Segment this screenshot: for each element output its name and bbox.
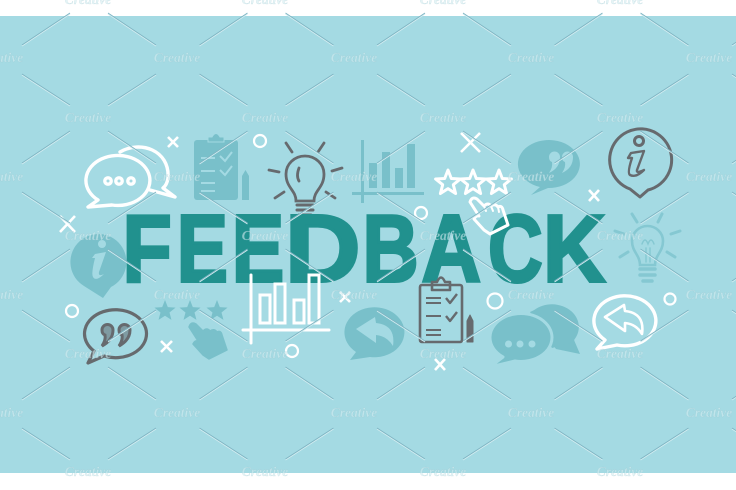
watermark labels: Creative [65, 464, 111, 479]
watermark labels: Creative [420, 346, 466, 361]
watermark labels: Creative [597, 346, 643, 361]
icon: grey info bubble [610, 129, 672, 197]
watermark labels: Creative [65, 346, 111, 361]
icon: muted bar chart [352, 140, 424, 203]
icon: grey light bulb [269, 143, 342, 215]
watermark labels: Creative [508, 405, 554, 420]
watermark labels: Creative [65, 110, 111, 125]
watermark labels: Creative [597, 110, 643, 125]
watermark labels: Creative [597, 464, 643, 479]
watermark labels: Creative [331, 405, 377, 420]
icon: grey quote bubble [85, 310, 147, 363]
watermark labels: Creative [686, 405, 732, 420]
watermark labels: Creative [154, 50, 200, 65]
watermark labels: Creative [154, 169, 200, 184]
title: D [285, 195, 361, 303]
icon: grey clipboard [420, 278, 473, 342]
watermark labels: Creative [65, 228, 111, 243]
watermark labels: Creative [331, 169, 377, 184]
watermark labels: Creative [154, 287, 200, 302]
icon: white bar chart [243, 275, 329, 343]
title: A [422, 195, 481, 302]
icon: white pointing hand [470, 198, 508, 234]
watermark labels: Creative [242, 346, 288, 361]
icon: white double speech bubbles [86, 147, 175, 207]
icon: muted quote bubble [518, 140, 580, 195]
decorative rings [66, 135, 676, 357]
decorative crosses [60, 133, 599, 370]
watermark labels: Creative [154, 405, 200, 420]
watermark labels: Creative [242, 464, 288, 479]
watermark labels: Creative [420, 110, 466, 125]
icon: muted clipboard [194, 134, 249, 200]
icon: muted reply bubble [344, 307, 404, 360]
watermark labels: Creative [508, 169, 554, 184]
title: E [177, 195, 228, 302]
watermark labels: Creative [508, 287, 554, 302]
watermark labels: Creative [686, 287, 732, 302]
watermark labels: Creative [420, 228, 466, 243]
title: K [543, 195, 605, 303]
icon: muted stars [154, 300, 228, 320]
watermark labels: Creative [331, 50, 377, 65]
icon: faded light bulb [615, 214, 680, 281]
icon: muted double speech bubbles [490, 304, 580, 367]
icon: white stars [436, 170, 511, 194]
title: C [488, 196, 543, 303]
watermark labels: Creative [242, 110, 288, 125]
title: B [362, 195, 419, 302]
watermark labels: Creative [331, 287, 377, 302]
watermark labels: Creative [686, 169, 732, 184]
watermark labels: Creative [420, 464, 466, 479]
title [122, 195, 605, 303]
title: F [122, 195, 172, 302]
icon: white reply bubble [594, 296, 656, 349]
icon: muted info bubble [70, 234, 126, 298]
watermark labels: Creative [242, 228, 288, 243]
icon: muted pointing hand [189, 323, 227, 359]
title: E [232, 195, 284, 302]
watermark labels: Creative [597, 228, 643, 243]
watermark labels: Creative [508, 50, 554, 65]
watermark labels: Creative [686, 50, 732, 65]
